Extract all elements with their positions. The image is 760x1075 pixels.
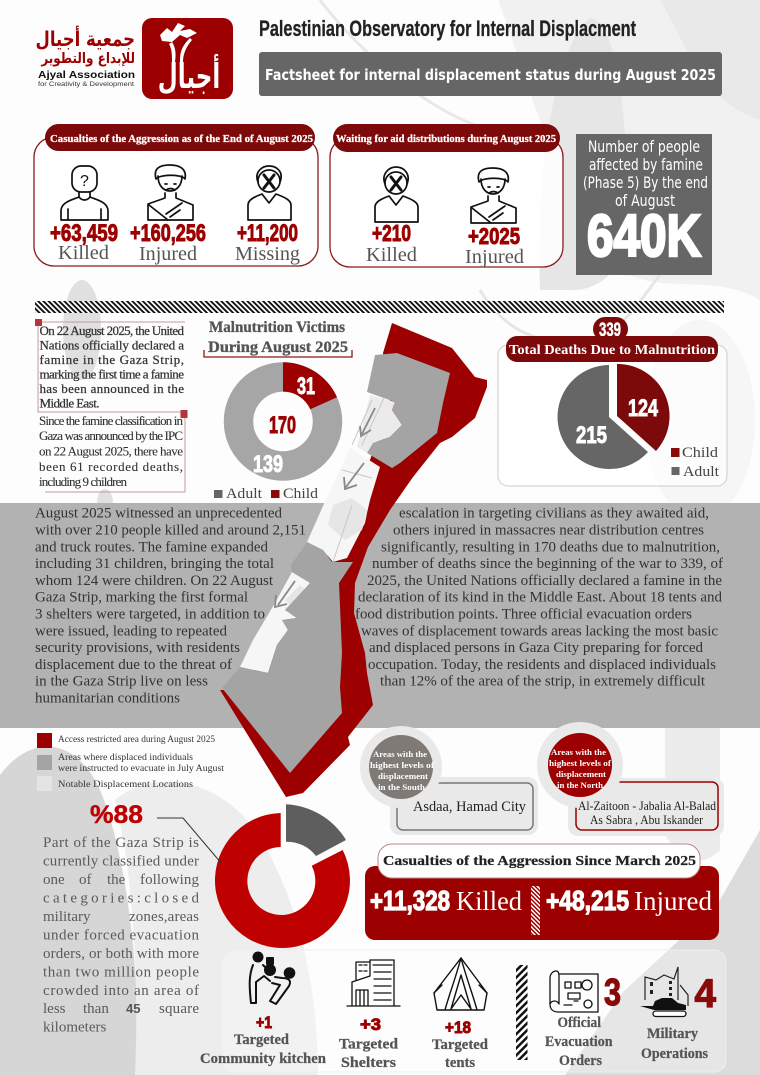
pie chart <box>558 364 670 469</box>
stat: official evacuation orders <box>545 971 621 1069</box>
panel heading: Total Deaths Due to Malnutrition <box>509 343 715 358</box>
total badge: 339 <box>599 320 621 341</box>
callout: highest displacement in the north: Areas with the <box>551 748 606 757</box>
summary text right: declaration of its kind in the Middle East. About 18 tents and <box>358 590 722 606</box>
logo: Ajyal Association <box>36 18 233 99</box>
summary text left: including 31 children, bringing the total <box>35 556 274 572</box>
stat: injured: Injured <box>139 243 197 265</box>
panel: people affected by famine: of August <box>615 191 675 210</box>
summary text left: with over 210 people killed and around 2,151 <box>35 522 306 538</box>
callout: highest displacement in the north: As Sabra , Abu Iskander <box>590 812 704 827</box>
summary text left: were issued, leading to repeated <box>35 623 228 639</box>
text block: famine declaration <box>35 319 185 412</box>
text block: famine declaration: marking the first time a famine <box>40 367 184 382</box>
panel: casualties since March 2025: Injured <box>634 886 712 916</box>
text block: deaths since classification: Since the famine classification in <box>39 413 184 428</box>
legend: Adult <box>226 486 263 502</box>
summary text left: in the Gaza Strip live on less <box>35 674 208 690</box>
summary text right: escalation in targeting civilians as they awaited aid, <box>399 506 709 522</box>
logo wordmark <box>36 25 135 88</box>
title: Palestinian Observatory for Internal Displacment <box>259 16 636 41</box>
summary text left: whom 124 were children. On 22 August <box>35 573 274 589</box>
callout: highest displacement in the north: Al-Zaitoon - Jabalia Al-Balad <box>578 798 716 813</box>
stat: targeted tents: tents <box>445 1055 475 1071</box>
leader line <box>157 818 222 864</box>
panel: casualties since March 2025: Casualties of the Aggression Since March 2025 <box>383 854 696 869</box>
stat: injured <box>130 220 206 265</box>
stat: targeted shelters: Targeted <box>339 1036 399 1052</box>
icon: killed person <box>375 167 418 222</box>
icon: injured person <box>471 168 516 223</box>
map: Gaza Strip <box>220 323 487 797</box>
text block: classification of the strip: than two million people <box>43 964 199 980</box>
text block: classification of the strip: crowded into an area of <box>43 983 199 999</box>
stat: targeted shelters: Shelters <box>341 1055 396 1071</box>
text block: classification of the strip: kilometers <box>43 1020 106 1036</box>
stat: injured: Injured <box>465 246 524 268</box>
legend: map categories <box>37 733 225 791</box>
panel: people affected by famine <box>576 134 712 275</box>
summary text right: number of deaths since the beginning of the war to 339, of <box>372 556 723 572</box>
callout: highest displacement in the north <box>537 722 724 836</box>
chart: malnutrition victims during August 2025 <box>204 319 352 502</box>
donut chart: 170 <box>269 412 296 439</box>
callout: highest displacement in the south: in the South <box>378 783 426 792</box>
stat: official evacuation orders: 3 <box>604 972 621 1014</box>
stat: targeted tents: Targeted <box>432 1037 489 1053</box>
text block: famine declaration: has been announced in the <box>40 381 184 396</box>
summary text right: occupation. Today, the residents and displaced individuals <box>368 657 716 673</box>
callout: highest displacement in the north: displacement <box>556 770 606 779</box>
panel: people affected by famine: (Phase 5) By the end <box>583 173 708 192</box>
panel: monthly summary band <box>0 503 760 728</box>
logo mark: tree and name <box>142 18 233 99</box>
text block: deaths since classification <box>39 410 188 492</box>
donut chart: 88 percent of the strip <box>157 804 350 948</box>
legend: map categories: Access restricted area during August 2025 <box>58 734 216 744</box>
panel: casualties since March 2025: +11,328 <box>370 885 450 916</box>
text block: classification of the strip <box>43 835 200 1036</box>
text block: classification of the strip: zones,areas <box>129 909 199 925</box>
chart heading <box>204 319 352 357</box>
icon: injured person <box>148 165 193 220</box>
stat: injured: +160,256 <box>130 220 206 247</box>
text block: deaths since classification: been 61 recorded deaths, <box>39 459 183 474</box>
stat: military operations <box>640 967 717 1062</box>
stat: killed: +63,459 <box>50 220 118 247</box>
text block: famine declaration: famine in the Gaza Strip, <box>40 352 184 367</box>
total badge <box>593 317 628 341</box>
stat: missing: Missing <box>235 243 300 265</box>
summary text right: than 12% of the area of the strip, in extremely difficult <box>380 674 706 690</box>
panel heading <box>506 336 718 362</box>
stat: targeted community kitchen: +1 <box>256 1013 272 1032</box>
stat: official evacuation orders: Official <box>558 1015 601 1031</box>
callout: highest displacement in the south: displacement <box>378 772 428 781</box>
callout: highest displacement in the south: highest levels of <box>370 761 434 770</box>
callout: highest displacement in the south <box>360 726 538 835</box>
chart heading: During August 2025 <box>208 339 348 356</box>
stat: targeted community kitchen: Targeted <box>234 1032 290 1048</box>
stat: targeted community kitchen <box>200 952 327 1067</box>
icon: evacuation plan <box>550 971 598 1012</box>
logo wordmark: Ajyal Association <box>38 70 135 81</box>
text block: famine declaration: On 22 August 2025, the United <box>40 323 184 338</box>
hatched divider <box>35 301 724 313</box>
text block: classification of the strip: one <box>43 872 65 888</box>
panel: casualties since March 2025: Killed <box>456 886 522 916</box>
stat: 88 percent: %88 <box>90 801 143 829</box>
map: access restricted area <box>220 323 487 797</box>
stat: military operations: Operations <box>641 1046 708 1062</box>
summary text right: others injured in massacres near distribution centres <box>393 522 704 538</box>
stat: killed: Killed <box>366 244 417 266</box>
panel: waiting for aid distributions <box>330 124 563 268</box>
map: notable displacement locations <box>240 395 402 673</box>
text block: famine declaration: Nations officially declared a <box>40 338 184 353</box>
icon: missing person <box>248 166 291 220</box>
logo wordmark: جمعية أجيال <box>36 25 135 52</box>
stat: missing <box>235 220 300 265</box>
summary text left: displacement due to the threat of <box>35 657 232 673</box>
stat: military operations: Military <box>647 1026 698 1042</box>
icon: tank and ruined buildings <box>640 967 688 1016</box>
text block: classification of the strip: military <box>43 909 91 925</box>
text block: classification of the strip: under forced evacuation <box>43 928 200 944</box>
icon: tent <box>434 958 487 1010</box>
stat: injured <box>465 223 524 268</box>
panel: total deaths due to malnutrition <box>498 317 727 486</box>
summary text right: food distribution points. Three official evacuation orders <box>355 606 692 622</box>
text block: deaths since classification: on 22 August 2025, there have <box>39 444 183 459</box>
summary text right: waves of displacement towards areas lacking the most basic <box>361 623 718 639</box>
summary text left: Gaza Strip, marking the first formal <box>35 590 248 606</box>
panel: targeted facilities and operations <box>200 950 726 1072</box>
stat: targeted shelters: +3 <box>360 1015 381 1034</box>
panel: waiting for aid distributions: Waiting for aid distributions during August 2025 <box>336 134 556 145</box>
text block: classification of the strip: the <box>107 872 126 888</box>
legend: Child <box>682 445 719 461</box>
stat: targeted tents: +18 <box>445 1018 471 1037</box>
text block: classification of the strip: orders, or both with more <box>43 946 199 962</box>
summary text left: humanitarian conditions <box>35 690 180 706</box>
stat: targeted tents <box>432 958 489 1071</box>
text block: deaths since classification: including 9 children <box>39 474 128 489</box>
stat: killed: +210 <box>372 220 411 246</box>
stat: killed <box>50 220 118 264</box>
stat: official evacuation orders: Evacuation <box>545 1034 613 1050</box>
text block: classification of the strip: categories:closed <box>43 890 200 906</box>
text block: classification of the strip: of <box>79 872 92 888</box>
legend: Adult <box>683 464 720 480</box>
legend: map categories: were instructed to evacuate in July August <box>58 763 225 773</box>
stat: killed <box>366 220 417 266</box>
stat: targeted community kitchen: Community kitchen <box>200 1051 327 1067</box>
legend: Child <box>283 486 319 502</box>
summary text right: and displaced persons in Gaza City preparing for forced <box>369 640 704 656</box>
donut chart: 31 <box>297 373 315 400</box>
callout: highest displacement in the north: highest levels of <box>549 759 611 768</box>
legend <box>671 445 720 480</box>
stat: killed: Killed <box>58 242 109 264</box>
panel: people affected by famine: 640K <box>587 203 701 269</box>
summary text left: August 2025 witnessed an unprecedented <box>35 506 282 522</box>
stat: military operations: 4 <box>694 972 717 1016</box>
donut chart <box>238 362 337 478</box>
subtitle bar <box>259 52 722 96</box>
summary text right: significantly, resulting in 170 deaths due to malnutrition, <box>381 539 720 555</box>
text block: classification of the strip: less <box>43 1001 66 1017</box>
legend <box>214 486 319 502</box>
stat: official evacuation orders: Orders <box>559 1053 602 1069</box>
logo wordmark: for Creativity & Development <box>38 82 134 88</box>
callout: highest displacement in the south: Areas with the <box>373 750 427 759</box>
summary text left: 3 shelters were targeted, in addition to <box>35 606 265 622</box>
text block: classification of the strip: 45 <box>126 1001 140 1016</box>
logo mark: tree and name: أجيال <box>158 54 220 96</box>
callout: highest displacement in the north: in the North <box>557 781 604 790</box>
legend: map categories: Notable Displacement Locations <box>58 779 194 789</box>
summary text left: security provisions, with residents <box>35 640 240 656</box>
icon: shelter building <box>347 960 400 1006</box>
panel: casualties since March 2025: +48,215 <box>546 885 629 916</box>
icon: food handover <box>250 952 294 1004</box>
summary text left <box>35 506 306 706</box>
donut chart: 139 <box>253 451 283 478</box>
panel: casualties since March 2025 <box>365 844 719 940</box>
chart heading: Malnutrition Victims <box>209 319 345 336</box>
text block: famine declaration: Middle East. <box>40 396 100 411</box>
panel: casualties of the aggression: Casualties of the Aggression as of the End of August 2025 <box>50 134 313 145</box>
panel: people affected by famine: affected by famine <box>589 155 703 174</box>
text block: deaths since classification: Gaza was announced by the IPC <box>39 428 183 443</box>
callout: highest displacement in the south: Asdaa, Hamad City <box>413 799 526 815</box>
map: evacuation areas <box>222 353 450 773</box>
icon: unknown person <box>61 166 108 220</box>
summary text right <box>355 506 723 690</box>
text block: classification of the strip: than <box>83 1001 109 1017</box>
stat: targeted shelters <box>339 960 400 1071</box>
summary text left: and truck routes. The famine expanded <box>35 539 268 555</box>
pie chart: 215 <box>576 422 607 449</box>
summary text right: 2025, the United Nations officially declared a famine in the <box>367 573 722 589</box>
text block: classification of the strip: following <box>140 872 200 888</box>
panel: casualties of the aggression <box>34 124 318 266</box>
text block: classification of the strip: currently classified under <box>43 854 199 870</box>
legend: map categories: Areas where displaced individuals <box>58 752 194 762</box>
stat: injured: +2025 <box>468 223 520 249</box>
map: displacement arrows <box>275 408 375 607</box>
icon: unknown person: ? <box>80 173 89 190</box>
pie chart: 124 <box>628 395 658 422</box>
panel: people affected by famine: Number of people <box>588 137 700 156</box>
text block: classification of the strip: Part of the Gaza Strip is <box>43 835 199 851</box>
stat: missing: +11,200 <box>237 220 298 247</box>
logo wordmark: للإبداع والتطوير <box>40 51 135 67</box>
text block: classification of the strip: square <box>159 1001 199 1017</box>
